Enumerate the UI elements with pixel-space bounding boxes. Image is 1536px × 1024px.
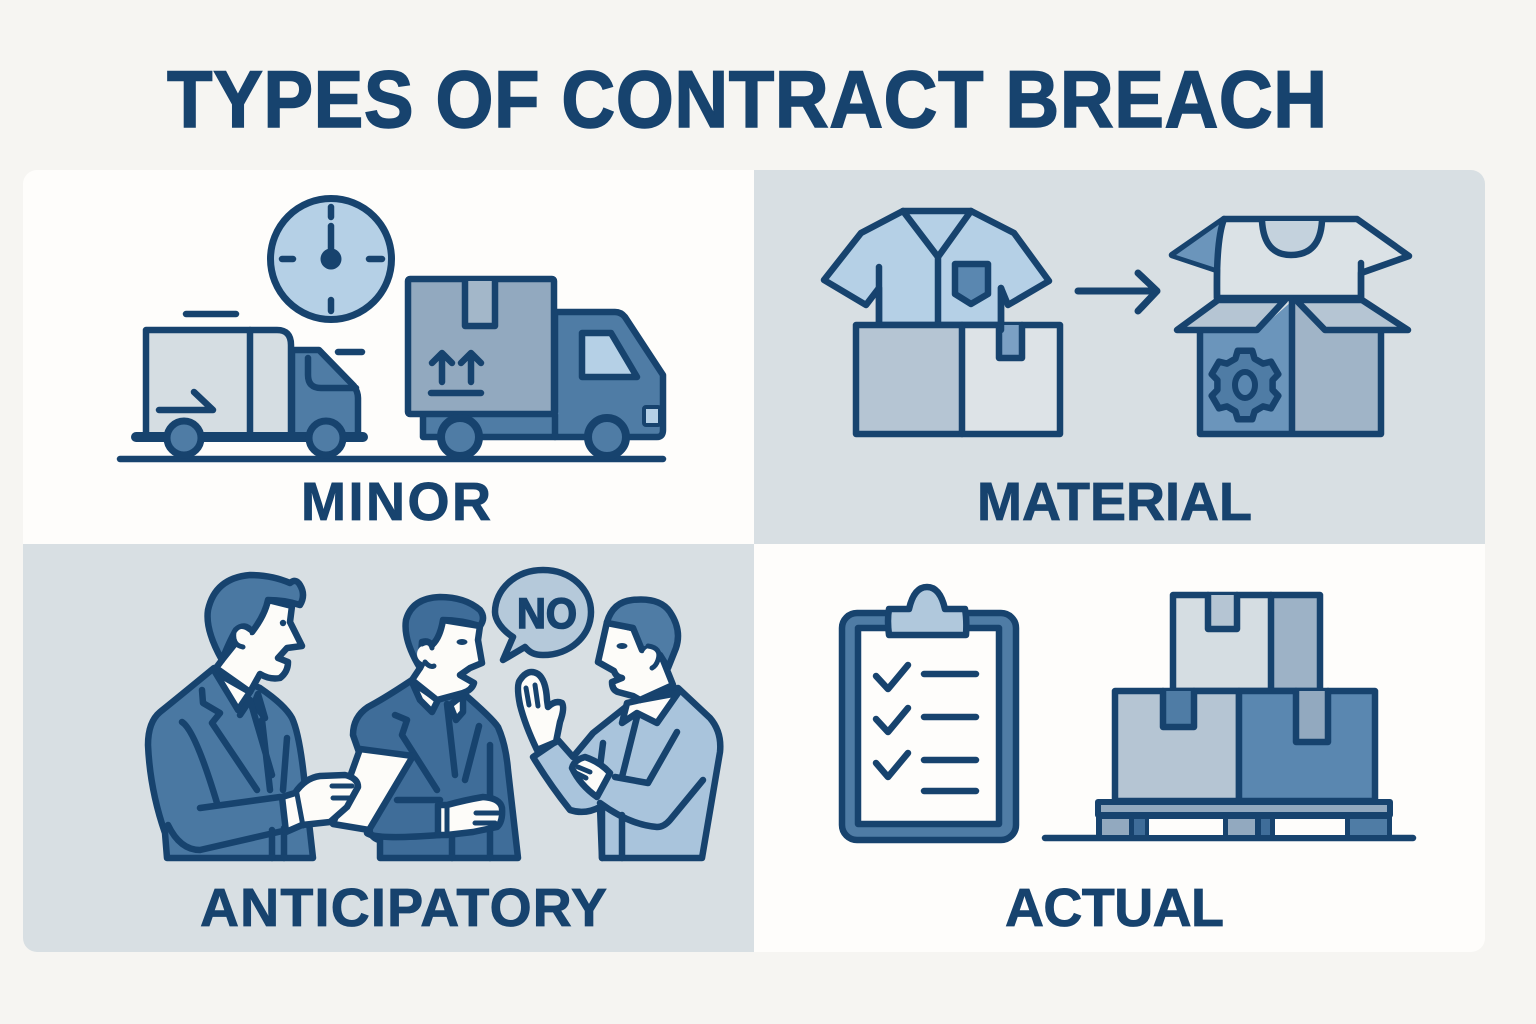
- figure: man 1 holding document: [148, 575, 413, 858]
- box: top: [1173, 595, 1320, 691]
- figure: man 2 in suit: [353, 597, 518, 858]
- panel: anticipatory: [23, 544, 754, 952]
- label: anticipatory: ANTICIPATORY: [200, 878, 607, 938]
- speech bubble: NO: [495, 570, 591, 660]
- icon: clipboard checklist: [842, 587, 1016, 840]
- hand: folded arm: [438, 797, 502, 835]
- hand: raised palm: [518, 672, 563, 750]
- box: lower right: [1239, 691, 1375, 801]
- box: lower left: [1115, 691, 1239, 801]
- panel: material: [754, 170, 1485, 544]
- label: minor: MINOR: [301, 472, 491, 532]
- arrow: [1078, 273, 1157, 311]
- panel: minor: [23, 170, 754, 544]
- icon: clock: [270, 198, 392, 320]
- label: actual: ACTUAL: [1005, 878, 1224, 938]
- panel: actual: [754, 544, 1485, 952]
- figure: man 3 objecting: [518, 600, 720, 858]
- title: TYPES OF CONTRACT BREACH: [167, 55, 1327, 145]
- icon: shirt in box: [824, 211, 1060, 434]
- icon: stacked boxes on pallet: [1045, 595, 1413, 838]
- speech bubble: NO: NO: [517, 590, 577, 638]
- label: material: MATERIAL: [977, 472, 1252, 532]
- icon: small delivery truck: [136, 314, 363, 455]
- icon: large delivery truck: [408, 279, 663, 456]
- hand: holding document: [282, 775, 358, 832]
- icon: ground line: [120, 456, 663, 462]
- pallet: [1096, 802, 1392, 838]
- document: [333, 749, 413, 830]
- icon: gear: [1212, 351, 1278, 419]
- icon: wrong item in box: [1172, 219, 1409, 434]
